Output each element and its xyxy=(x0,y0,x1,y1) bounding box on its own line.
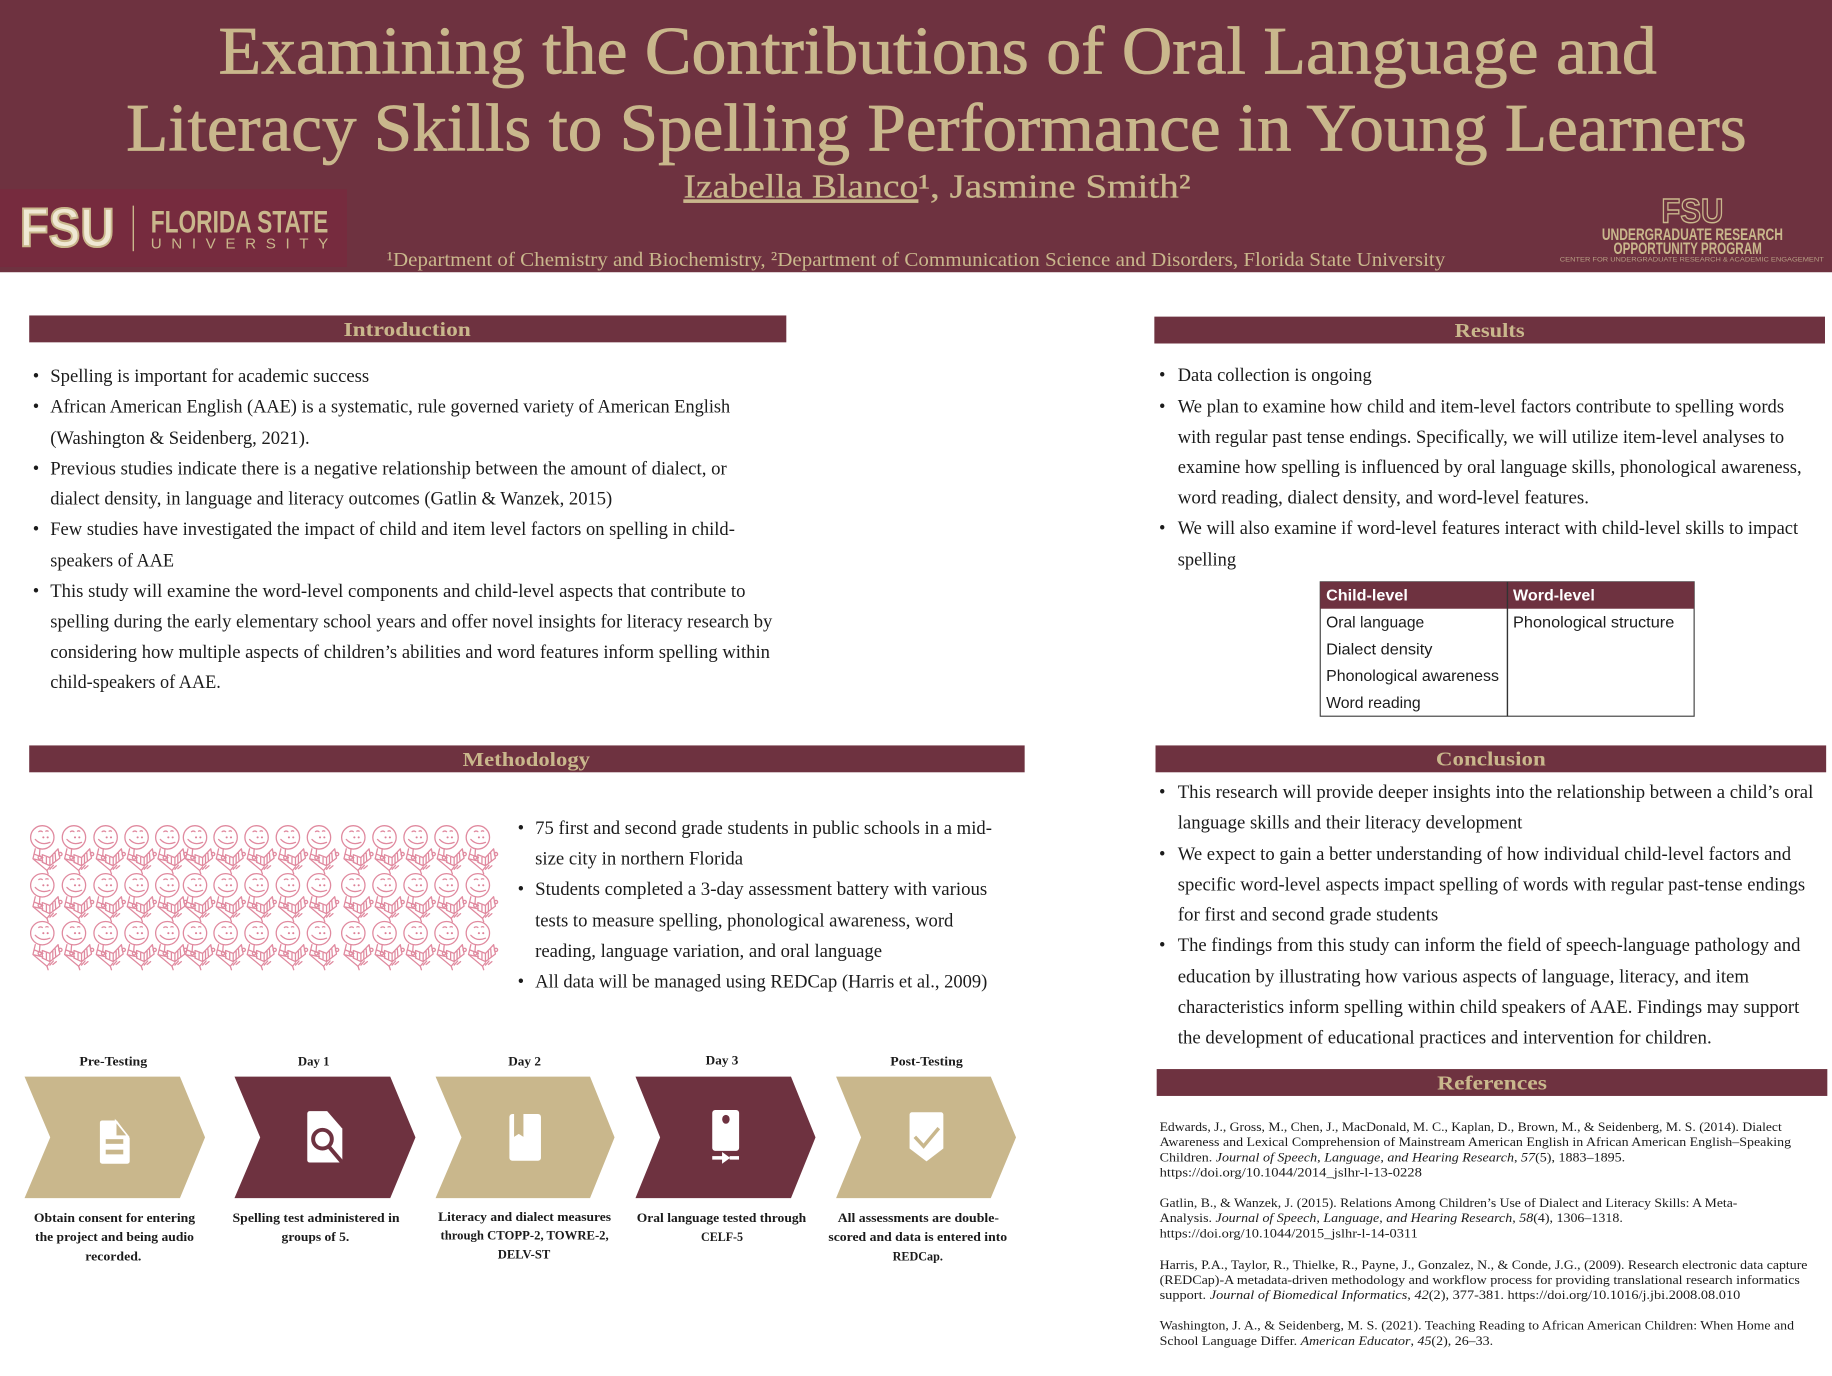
step: pre-testing: Obtain consent for entering xyxy=(34,1211,196,1225)
results bullets: We plan to examine how child and item-level factors contribute to spelling words xyxy=(1178,396,1784,416)
table: child-level and word-level factors: Phonological awareness xyxy=(1326,668,1499,685)
heading: introduction xyxy=(29,315,786,342)
conclusion bullets: specific word-level aspects impact spelling of words with regular past-tense endings xyxy=(1178,874,1805,894)
methodology bullets: size city in northern Florida xyxy=(535,849,743,869)
methodology bullets: 75 first and second grade students in public schools in a mid- xyxy=(535,818,992,838)
introduction bullets: • xyxy=(33,581,39,601)
process timeline xyxy=(25,1053,1016,1264)
results bullets: spelling xyxy=(1178,549,1236,569)
methodology bullets: All data will be managed using REDCap (Harris et al., 2009) xyxy=(535,971,987,992)
panel: introduction xyxy=(29,315,786,692)
step: pre-testing: the project and being audio xyxy=(35,1230,194,1244)
heading: references xyxy=(1157,1069,1827,1096)
reference list: Children. Journal of Speech, Language, and Hearing Research , 57(5), 1883–1895. xyxy=(1160,1149,1625,1164)
step: post-testing: REDCap. xyxy=(893,1250,943,1264)
heading: conclusion xyxy=(1156,745,1826,772)
step: post-testing: All assessments are double- xyxy=(838,1211,999,1225)
reference list: Analysis. Journal of Speech, Language, and Hearing Research , 58(4), 1306–1318. xyxy=(1160,1210,1623,1225)
introduction bullets: Spelling is important for academic success xyxy=(50,366,369,386)
methodology bullets: • xyxy=(518,879,524,899)
introduction bullets: African American English (AAE) is a systematic, rule governed variety of American English xyxy=(50,396,730,417)
reference list: https://doi.org/10.1044/2015_jslhr-l-14-0311 xyxy=(1160,1225,1418,1240)
logo: Florida State University: UNIVERSITY xyxy=(151,235,328,252)
step: day 1: groups of 5. xyxy=(282,1230,349,1244)
table: child-level and word-level factors: Word reading xyxy=(1326,695,1421,712)
table: child-level and word-level factors: Phonological structure xyxy=(1513,614,1674,631)
results bullets: Data collection is ongoing xyxy=(1178,365,1372,385)
icon: book with bookmark xyxy=(509,1114,541,1161)
introduction bullets: (Washington & Seidenberg, 2021). xyxy=(50,428,310,449)
introduction bullets: Few studies have investigated the impact of child and item level factors on spelling in child- xyxy=(50,519,735,539)
title xyxy=(126,14,1747,166)
step: day 2 xyxy=(436,1055,615,1261)
heading: references: References xyxy=(1437,1073,1547,1095)
conclusion bullets: The findings from this study can inform the field of speech-language pathology and xyxy=(1178,935,1800,955)
methodology bullets: • xyxy=(518,818,524,838)
step: day 3: CELF-5 xyxy=(701,1230,743,1244)
results bullets: • xyxy=(1159,518,1165,538)
logo: Florida State University xyxy=(0,189,347,267)
introduction bullets: • xyxy=(33,458,39,478)
table: child-level and word-level factors xyxy=(1320,582,1694,716)
results bullets xyxy=(1159,365,1802,569)
step: pre-testing: recorded. xyxy=(85,1250,141,1264)
introduction bullets: Previous studies indicate there is a negative relationship between the amount of dialect, or xyxy=(50,458,727,478)
logo: Florida State University: FLORIDA STATE xyxy=(151,204,328,240)
conclusion bullets: characteristics inform spelling within child speakers of AAE. Findings may support xyxy=(1178,997,1800,1017)
results bullets: with regular past tense endings. Specifically, we will utilize item-level analyses to xyxy=(1178,427,1784,447)
introduction bullets: speakers of AAE xyxy=(50,551,174,571)
heading: results xyxy=(1154,317,1825,344)
conclusion bullets: We expect to gain a better understanding of how individual child-level factors and xyxy=(1178,844,1791,864)
introduction bullets: This study will examine the word-level components and child-level aspects that contribute to xyxy=(50,581,745,601)
introduction bullets: • xyxy=(33,366,39,386)
logo: Undergraduate Research Opportunity Program: FSU xyxy=(1661,193,1723,231)
step: day 2: DELV-ST xyxy=(498,1247,551,1261)
table: child-level and word-level factors: Word-level xyxy=(1513,588,1595,605)
introduction bullets: child-speakers of AAE. xyxy=(50,672,221,692)
conclusion bullets: the development of educational practices and intervention for children. xyxy=(1178,1027,1712,1047)
panel: results xyxy=(1154,317,1825,716)
results bullets: • xyxy=(1159,396,1165,416)
reference list: Awareness and Lexical Comprehension of Mainstream American English in African American English–Speaking xyxy=(1160,1134,1792,1149)
reference list: https://doi.org/10.1044/2014_jslhr-l-13-0228 xyxy=(1160,1165,1422,1180)
results bullets: word reading, dialect density, and word-level features. xyxy=(1178,488,1589,508)
conclusion bullets xyxy=(1159,782,1813,1047)
header banner xyxy=(0,0,1832,272)
step: post-testing: Post-Testing xyxy=(890,1055,963,1069)
heading: results: Results xyxy=(1455,320,1525,342)
icon: shield check xyxy=(910,1112,943,1161)
authors: ¹, Jasmine Smith² xyxy=(918,168,1191,205)
step: day 3 xyxy=(635,1053,816,1244)
heading: methodology: Methodology xyxy=(463,749,591,771)
introduction bullets: spelling during the early elementary school years and offer novel insights for literacy research by xyxy=(50,611,773,631)
title: Examining the Contributions of Oral Language and xyxy=(218,14,1657,89)
step: pre-testing: Pre-Testing xyxy=(79,1055,148,1069)
panel: methodology xyxy=(25,745,1025,1264)
logo: Undergraduate Research Opportunity Program: CENTER FOR UNDERGRADUATE RESEARCH & ACADEMIC ENGAGEMENT xyxy=(1560,257,1824,264)
reference list: (REDCap)-A metadata-driven methodology and workflow process for providing translational research informatics xyxy=(1160,1272,1800,1287)
conclusion bullets: language skills and their literacy development xyxy=(1178,812,1523,832)
conclusion bullets: education by illustrating how various aspects of language, literacy, and item xyxy=(1178,967,1750,987)
icon: document xyxy=(100,1120,130,1164)
logo: Florida State University: FSU xyxy=(20,197,114,259)
logo: Undergraduate Research Opportunity Program: OPPORTUNITY PROGRAM xyxy=(1614,239,1762,258)
table: child-level and word-level factors: Child-level xyxy=(1326,588,1408,605)
step: post-testing xyxy=(828,1055,1016,1264)
reference list: School Language Differ. American Educator , 45(2), 26–33. xyxy=(1160,1333,1493,1348)
introduction bullets: • xyxy=(33,519,39,539)
conclusion bullets: for first and second grade students xyxy=(1178,905,1438,925)
conclusion bullets: • xyxy=(1159,935,1165,955)
reference list: Washington, J. A., & Seidenberg, M. S. (2021). Teaching Reading to African American Children: When Home and xyxy=(1160,1318,1795,1333)
heading: conclusion: Conclusion xyxy=(1436,748,1546,770)
icon: magnifier on document xyxy=(307,1111,342,1163)
heading: introduction: Introduction xyxy=(344,319,472,341)
icon grid: 75 reading children xyxy=(31,826,498,970)
conclusion bullets: This research will provide deeper insights into the relationship between a child’s oral xyxy=(1178,782,1813,802)
affiliations: ¹Department of Chemistry and Biochemistry, ²Department of Communication Science and Disorders, Florida State University xyxy=(387,249,1446,271)
introduction bullets: dialect density, in language and literacy outcomes (Gatlin & Wanzek, 2015) xyxy=(50,489,612,510)
step: day 3: Day 3 xyxy=(706,1053,738,1067)
reference list: support. Journal of Biomedical Informatics , 42(2), 377-381. https://doi.org/10.1016/j.jbi.2008.08.010 xyxy=(1160,1287,1741,1302)
authors: Izabella Blanco xyxy=(683,168,918,205)
step: day 1: Spelling test administered in xyxy=(233,1211,400,1225)
reference list: Harris, P.A., Taylor, R., Thielke, R., Payne, J., Gonzalez, N., & Conde, J.G., (2009). Research electronic data capture xyxy=(1160,1257,1808,1272)
step: day 2: Day 2 xyxy=(508,1055,541,1069)
step: post-testing: scored and data is entered into xyxy=(828,1230,1007,1244)
step: day 2: through CTOPP-2, TOWRE-2, xyxy=(440,1229,609,1243)
table: child-level and word-level factors: Dialect density xyxy=(1326,641,1432,658)
results bullets: • xyxy=(1159,365,1165,385)
introduction bullets: • xyxy=(33,396,39,416)
conclusion bullets: • xyxy=(1159,844,1165,864)
reference list: Gatlin, B., & Wanzek, J. (2015). Relations Among Children’s Use of Dialect and Literacy Skills: A Meta- xyxy=(1160,1195,1737,1210)
step: day 3: Oral language tested through xyxy=(637,1211,806,1225)
reference list: Edwards, J., Gross, M., Chen, J., MacDonald, M. C., Kaplan, D., Brown, M., & Seidenberg, M. S. (2014). Dialect xyxy=(1160,1119,1782,1134)
methodology bullets: reading, language variation, and oral language xyxy=(535,941,882,961)
step: day 2: Literacy and dialect measures xyxy=(438,1210,611,1224)
results bullets: examine how spelling is influenced by oral language skills, phonological awareness, xyxy=(1178,457,1802,477)
step: day 1: Day 1 xyxy=(298,1055,329,1069)
step: day 1 xyxy=(233,1055,415,1244)
heading: methodology xyxy=(29,745,1025,772)
methodology bullets xyxy=(518,818,992,992)
reference list xyxy=(1160,1119,1808,1348)
authors xyxy=(683,168,1191,205)
panel: conclusion xyxy=(1156,745,1826,1047)
step: pre-testing xyxy=(25,1055,205,1264)
logo: Undergraduate Research Opportunity Program xyxy=(1560,193,1824,264)
table: child-level and word-level factors: Oral language xyxy=(1326,614,1424,631)
conclusion bullets: • xyxy=(1159,782,1165,802)
methodology bullets: • xyxy=(518,971,524,991)
introduction bullets: considering how multiple aspects of children’s abilities and word features inform spelling within xyxy=(50,642,770,662)
methodology bullets: Students completed a 3-day assessment battery with various xyxy=(535,879,987,899)
title: Literacy Skills to Spelling Performance in Young Learners xyxy=(126,91,1747,166)
introduction bullets xyxy=(33,366,773,692)
panel: references xyxy=(1157,1069,1827,1348)
results bullets: We will also examine if word-level features interact with child-level skills to impact xyxy=(1178,518,1799,538)
icon: device with arrow xyxy=(712,1110,739,1164)
methodology bullets: tests to measure spelling, phonological awareness, word xyxy=(535,911,953,931)
